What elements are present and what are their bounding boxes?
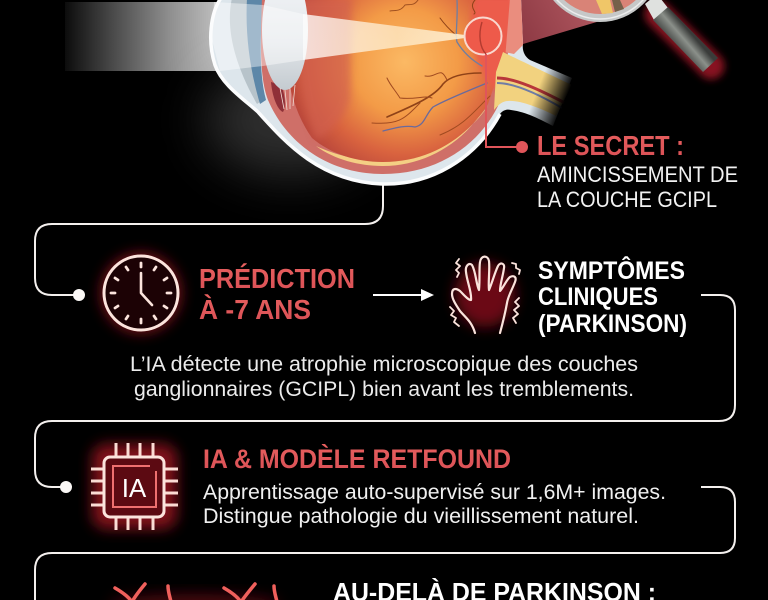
icon: neon neural shapes xyxy=(110,584,280,600)
magnifier wedge xyxy=(519,0,600,44)
sclera xyxy=(211,0,572,184)
icon: AI chip xyxy=(91,443,178,530)
ciliary body xyxy=(271,82,285,112)
heading: clinical symptoms xyxy=(538,255,687,338)
description: AI model: Apprentissage auto-supervisé sur 1,6M+ images. xyxy=(203,481,666,504)
callout: le secret xyxy=(537,130,738,212)
connector: AI to beyond xyxy=(35,487,735,600)
eye anatomy xyxy=(211,0,590,184)
connector dot: AI xyxy=(60,481,72,493)
callout: le secret: LE SECRET : xyxy=(537,130,684,161)
retinal vessels xyxy=(372,0,490,135)
icon: clock xyxy=(101,253,181,333)
target circle xyxy=(464,18,502,54)
connector: symptoms to AI xyxy=(35,295,735,487)
connector dot: prediction xyxy=(73,289,85,301)
yellow layer xyxy=(316,106,488,166)
heading: prediction: PRÉDICTION xyxy=(199,263,355,294)
cornea and iris xyxy=(230,0,266,104)
description: atrophy xyxy=(130,353,638,401)
magnifier xyxy=(519,0,718,72)
heading: prediction xyxy=(199,263,355,325)
macula area xyxy=(470,0,510,90)
focused light ray xyxy=(303,14,465,60)
magnifier glow xyxy=(658,14,711,66)
callout leader xyxy=(486,54,528,153)
heading: AI and RETFound: IA & MODÈLE RETFOUND xyxy=(203,443,511,474)
zonule fibres xyxy=(280,85,295,110)
retina interior xyxy=(283,0,516,162)
callout: le secret: LA COUCHE GCIPL xyxy=(537,187,717,212)
optic nerve xyxy=(494,52,590,135)
arrow xyxy=(373,289,434,301)
description: AI model xyxy=(203,481,666,528)
pink choroid layer xyxy=(261,0,514,174)
translucent beam through cornea xyxy=(212,2,303,71)
description: AI model: Distingue pathologie du vieillissement naturel. xyxy=(203,505,639,528)
heading: clinical symptoms: SYMPTÔMES xyxy=(538,255,685,285)
icon: AI chip: IA xyxy=(122,473,147,503)
lens xyxy=(262,0,308,90)
magnifier handle xyxy=(645,0,718,72)
heading: clinical symptoms: (PARKINSON) xyxy=(538,310,687,338)
heading: prediction: À -7 ANS xyxy=(199,294,311,325)
soft halo around eye xyxy=(205,65,375,175)
connector: eye to prediction xyxy=(35,183,383,295)
light beam entering eye xyxy=(65,2,225,71)
heading: clinical symptoms: CLINIQUES xyxy=(538,283,658,311)
callout: le secret: AMINCISSEMENT DE xyxy=(537,162,738,187)
icon: trembling hand xyxy=(450,257,520,333)
magnifier lens xyxy=(539,0,661,22)
description: atrophy: ganglionnaires (GCIPL) bien avant les tremblements. xyxy=(134,378,634,401)
salmon outer wall xyxy=(504,0,523,54)
description: atrophy: L’IA détecte une atrophie microscopique des couches xyxy=(130,353,638,376)
ribbed inner band xyxy=(298,0,352,140)
